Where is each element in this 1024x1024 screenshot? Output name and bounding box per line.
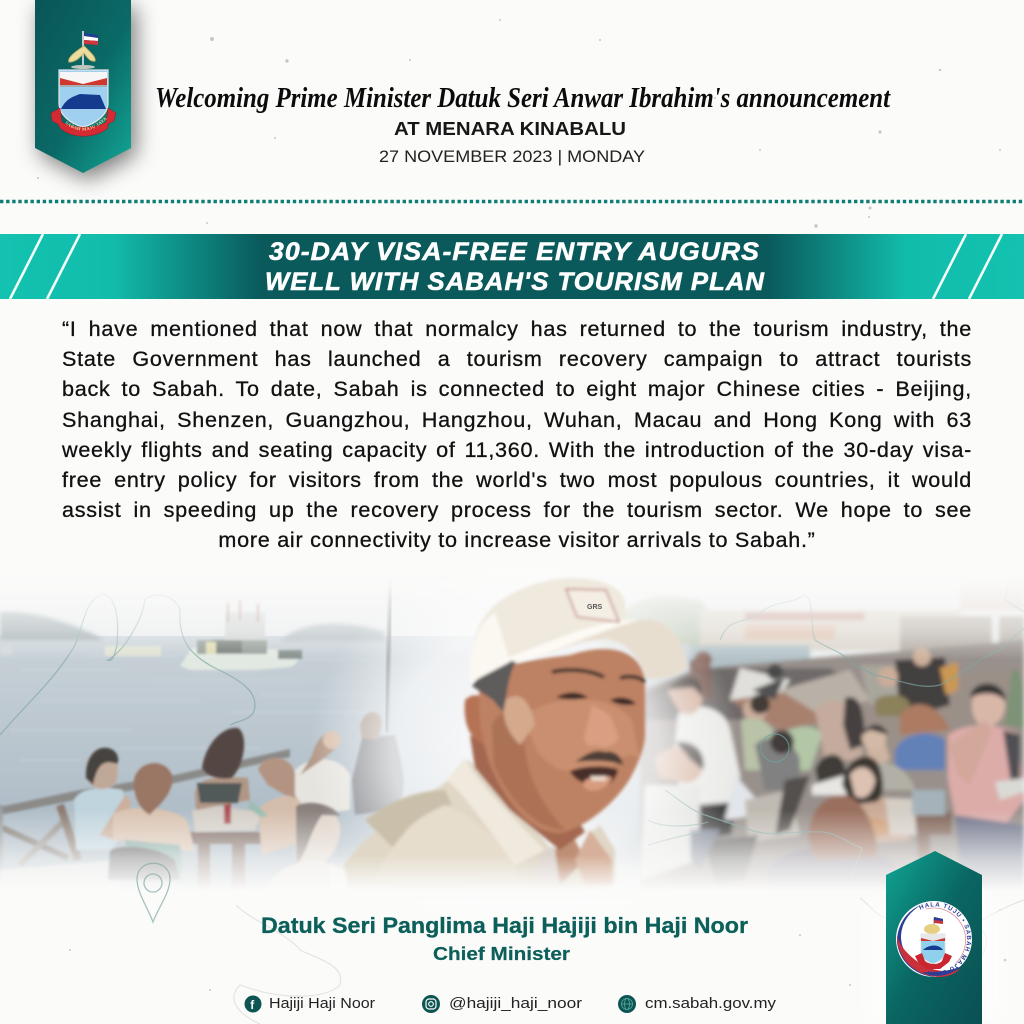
name: Datuk Seri Panglima Haji Hajiji bin Haji Noor	[261, 913, 748, 938]
palms and buildings	[600, 596, 740, 645]
nose	[584, 705, 618, 747]
faint map lines below photo	[234, 898, 1024, 1024]
quote text block: Shanghai, Shenzen, Guangzhou, Hangzhou, Wuhan, Macau and Hong Kong with 63	[62, 407, 972, 432]
front man looking up	[640, 785, 700, 880]
badge text: HALA TUJU • SABAH MAJU JAYA	[918, 902, 972, 976]
shirt	[344, 760, 615, 895]
woman with dark curly hair	[195, 777, 250, 810]
title banner: WELL WITH SABAH'S TOURISM PLAN	[265, 268, 765, 296]
title banner	[0, 234, 1024, 299]
pole	[386, 580, 391, 732]
flag	[82, 31, 84, 66]
quote text block: back to Sabah. To date, Sabah is connected to eight major Chinese cities - Beijing,	[62, 376, 972, 401]
table	[190, 832, 262, 890]
crowd base	[640, 640, 1024, 895]
table and chairs	[745, 790, 800, 842]
social: Instagram: @hajiji_haji_noor	[449, 995, 582, 1012]
face	[479, 649, 645, 833]
woman facing camera	[850, 795, 910, 845]
seated woman foreground	[295, 803, 340, 870]
portrait: Chief Minister	[330, 578, 687, 900]
woman from behind in purple jacket	[768, 846, 905, 895]
quote text block: weekly flights and seating capacity of 11,360. With the introduction of the 30-day visa-	[62, 437, 972, 462]
boats	[105, 600, 302, 670]
woman in white blouse	[295, 759, 350, 815]
left tourists group	[74, 712, 404, 895]
man in pink shirt	[948, 725, 1024, 825]
role: Chief Minister	[433, 943, 570, 964]
woman with sunglasses	[258, 796, 308, 855]
banner stripes	[10, 234, 1002, 299]
islands	[0, 612, 385, 655]
white fade bottom	[0, 810, 1024, 900]
map pin outline	[137, 863, 170, 922]
bottom white glow behind ribbon	[870, 900, 1000, 1024]
quote text block: “I have mentioned that now that normalcy has returned to the tourism industry, the	[62, 316, 972, 341]
top ribbon	[35, 0, 131, 173]
woman with hair bun	[113, 808, 195, 852]
sea	[0, 636, 700, 891]
blue and red crescents	[897, 905, 935, 977]
cap logo: GRS	[587, 604, 602, 611]
dotted divider	[0, 200, 1024, 203]
social: website: cm.sabah.gov.my	[645, 995, 777, 1012]
quote text block: State Government has launched a tourism recovery campaign to attract tourists	[62, 346, 972, 371]
woman in blue top	[74, 788, 128, 850]
social: website	[618, 995, 777, 1013]
map outlines	[0, 580, 1024, 885]
hair	[472, 660, 517, 712]
right crowd	[600, 580, 1024, 895]
icon: Sabah coat of arms	[50, 31, 116, 136]
brows and eyes	[552, 670, 604, 677]
social: Facebook: Hajiji Haji Noor	[269, 995, 375, 1012]
social: Facebook: f	[250, 998, 255, 1012]
icon: Hala Tuju badge	[896, 901, 972, 977]
cap	[470, 578, 626, 683]
photo wash	[0, 575, 1024, 895]
motto scroll	[51, 108, 116, 136]
quote text block	[62, 316, 972, 552]
back row	[895, 657, 950, 720]
quote text block: free entry policy for visitors from the world's two most populous countries, it would	[62, 467, 972, 492]
venue line: AT MENARA KINABALU	[394, 118, 626, 139]
standing dark dress	[352, 735, 404, 815]
motto text: SABAH MAJU JAYA	[65, 118, 107, 131]
quote text block: more air connectivity to increase visitor arrivals to Sabah.”	[218, 527, 816, 552]
sky	[0, 575, 1024, 895]
arms	[69, 46, 95, 62]
headline script: Welcoming Prime Minister Datuk Seri Anwar Ibrahim's announcement	[155, 82, 891, 114]
ribbon shadow	[40, 7, 136, 180]
date line: 27 NOVEMBER 2023 | MONDAY	[379, 147, 645, 166]
white fade top	[0, 560, 1024, 660]
neck	[470, 735, 585, 850]
photo collage: tourists by the sea	[0, 555, 1024, 945]
ear	[465, 695, 494, 745]
mini crest	[933, 918, 935, 928]
shield	[59, 70, 108, 127]
railing and deck	[0, 749, 290, 895]
white-shirt man	[672, 707, 740, 808]
banner title: 30-DAY VISA-FREE ENTRY AUGURS	[269, 238, 760, 266]
social: Instagram	[422, 995, 582, 1013]
quote text block: assist in speeding up the recovery process for the tourism sector. We hope to see	[62, 497, 972, 522]
moustache and mouth	[575, 751, 623, 765]
halo behind portrait	[310, 555, 740, 945]
mid row	[815, 700, 862, 760]
bottom ribbon	[886, 851, 982, 1024]
